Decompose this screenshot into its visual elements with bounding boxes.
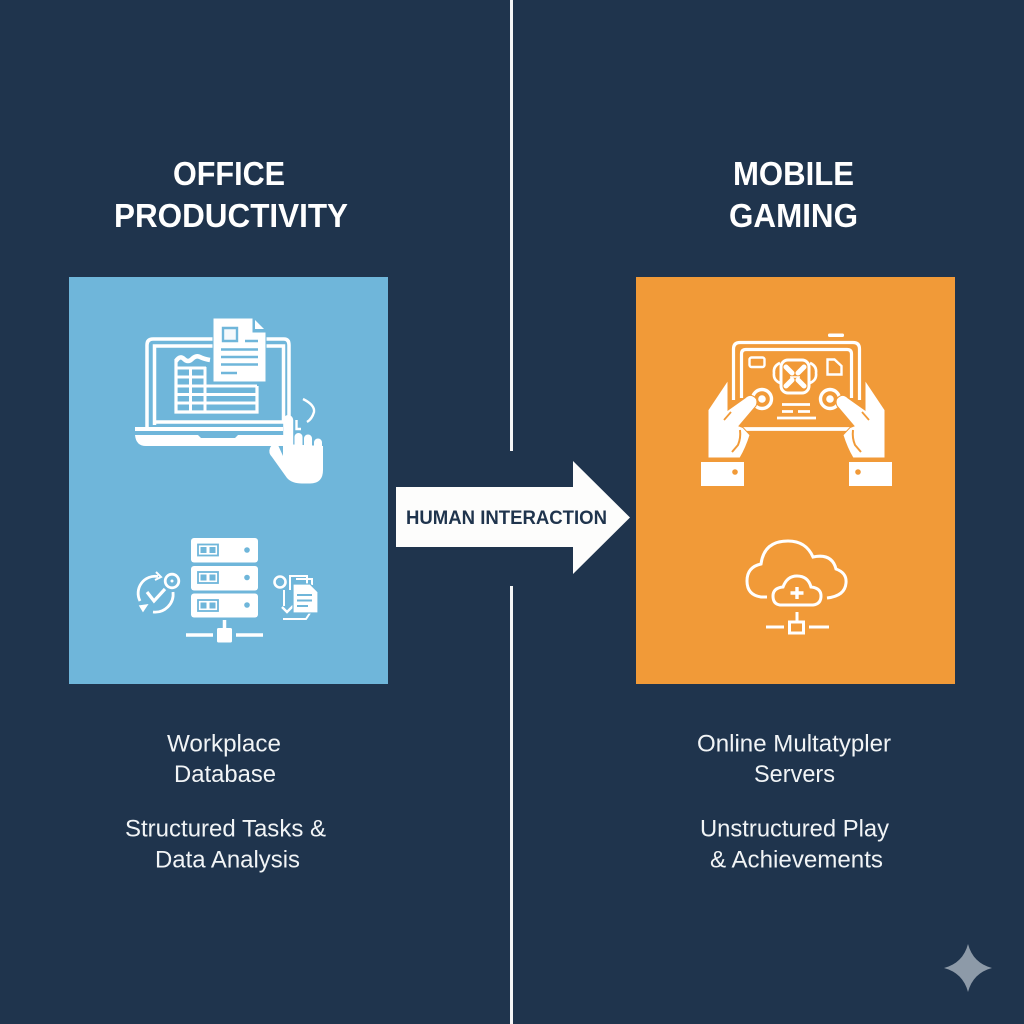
file check icon bbox=[274, 576, 318, 619]
arrow: human interaction bbox=[396, 461, 630, 574]
text: gaming captions bbox=[697, 730, 891, 874]
text: office captions: Structured Tasks & bbox=[125, 816, 326, 842]
right hand bbox=[836, 380, 892, 486]
heading: office productivity bbox=[114, 155, 348, 234]
character badge bbox=[774, 360, 816, 393]
left hand bbox=[701, 380, 757, 486]
heading: mobile gaming: MOBILE bbox=[733, 155, 854, 192]
text: office captions bbox=[125, 730, 326, 874]
center divider bbox=[510, 0, 513, 1024]
text: office captions: Database bbox=[174, 761, 276, 788]
text: gaming captions: Online Multatypler bbox=[697, 730, 891, 758]
icon: laptop with document and pointing hand bbox=[135, 318, 323, 484]
tablet body bbox=[734, 334, 860, 429]
text: office captions: Data Analysis bbox=[155, 846, 300, 874]
heading: office productivity: OFFICE bbox=[173, 155, 285, 192]
panel: office productivity bbox=[69, 277, 388, 684]
heading: office productivity: PRODUCTIVITY bbox=[114, 197, 348, 234]
arrow: human interaction: HUMAN INTERACTION bbox=[406, 507, 607, 529]
server stack bbox=[186, 538, 263, 642]
heading: mobile gaming: GAMING bbox=[729, 197, 858, 234]
text: gaming captions: Unstructured Play bbox=[700, 816, 889, 842]
icon: sparkle mark bbox=[944, 944, 992, 992]
heading: mobile gaming bbox=[729, 155, 858, 234]
icon: cloud network bbox=[747, 541, 846, 633]
sync check icon bbox=[138, 572, 179, 612]
icon: database server with sync and files bbox=[138, 538, 318, 642]
text: office captions: Workplace bbox=[167, 730, 281, 758]
joypads and menu lines bbox=[752, 390, 840, 418]
text: gaming captions: & Achievements bbox=[710, 846, 883, 874]
panel: mobile gaming bbox=[636, 277, 955, 684]
icon: hands holding tablet bbox=[701, 334, 892, 486]
text: gaming captions: Servers bbox=[754, 761, 835, 788]
